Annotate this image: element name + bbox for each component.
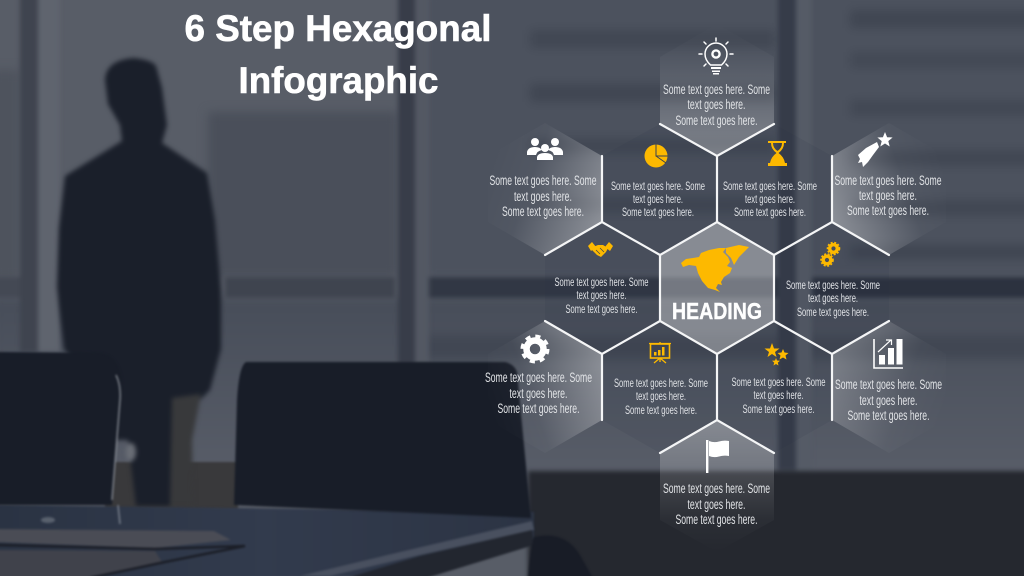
text block — [490, 173, 596, 219]
man silhouette — [57, 58, 221, 506]
panel: top hexagon — [663, 38, 770, 128]
text block: Some text goes here. Some — [490, 173, 596, 188]
text block: Some text goes here. Some — [663, 82, 770, 97]
panel: center heading hexagon — [672, 245, 762, 324]
center chair — [234, 362, 594, 576]
text block: text goes here. — [510, 386, 568, 401]
text block — [663, 481, 770, 527]
text block: text goes here. — [860, 393, 918, 408]
text block: Some text goes here. Some — [611, 179, 705, 193]
icon: hourglass — [768, 141, 787, 166]
text block: Some text goes here. Some — [485, 370, 592, 385]
heading text: HEADING — [672, 298, 762, 324]
panel: bottom hexagon — [663, 440, 770, 527]
hexagon white line grid — [545, 124, 889, 453]
text block: text goes here. — [576, 288, 626, 302]
text block: Some text goes here. Some — [835, 377, 942, 392]
table with notebook — [0, 505, 534, 576]
icon: growth bar chart — [874, 339, 903, 368]
panel: upper right hexagon — [834, 132, 942, 218]
panel: presentation hexagon — [614, 342, 708, 417]
text block: text goes here. — [754, 388, 804, 402]
text block: text goes here. — [808, 291, 858, 305]
panel: handshake hexagon — [554, 242, 649, 316]
text block: text goes here. — [745, 192, 795, 206]
panel: yellow gears hexagon — [786, 242, 880, 319]
text block: Some text goes here. — [622, 205, 694, 219]
icon: presentation board — [649, 342, 671, 363]
text block: Some text goes here. — [676, 113, 758, 128]
text block — [554, 275, 649, 316]
icon: pie chart — [644, 144, 668, 168]
text block — [835, 377, 942, 423]
text block: text goes here. — [514, 189, 572, 204]
text block — [732, 375, 826, 416]
panel: stars hexagon — [732, 343, 826, 416]
text block: Some text goes here. — [566, 302, 638, 316]
text block: Some text goes here. Some — [786, 278, 880, 292]
text block: Some text goes here. Some — [723, 179, 817, 193]
text block: Some text goes here. — [676, 512, 758, 527]
icon: north america map — [681, 245, 749, 292]
text block — [485, 370, 592, 416]
icon: people group — [527, 138, 563, 160]
text block: Some text goes here. Some — [732, 375, 826, 389]
text block: Some text goes here. — [742, 402, 814, 416]
text block — [723, 179, 817, 219]
text block — [611, 179, 705, 219]
text block: Some text goes here. Some — [554, 275, 649, 289]
icon: handshake — [588, 242, 613, 257]
panel: lower left hexagon — [485, 336, 592, 416]
text block: Some text goes here. Some — [614, 376, 708, 390]
text block: text goes here. — [688, 497, 746, 512]
text block: text goes here. — [859, 188, 917, 203]
text block: Some text goes here. — [625, 403, 697, 417]
title: Infographic — [238, 60, 438, 101]
text block: text goes here. — [688, 97, 746, 112]
icon: gears — [821, 242, 840, 266]
panel: upper left hexagon — [490, 138, 596, 219]
panel: hourglass hexagon — [723, 141, 817, 219]
title: 6 Step Hexagonal — [184, 8, 492, 49]
text block: Some text goes here. — [848, 408, 930, 423]
text block — [786, 278, 880, 319]
text block — [663, 82, 770, 128]
panel: lower right hexagon — [835, 339, 942, 423]
text block: Some text goes here. — [502, 204, 584, 219]
icon: three stars — [764, 343, 788, 366]
icon: light bulb with gear — [699, 38, 733, 74]
translucent hexagon fills — [488, 24, 946, 552]
left chair — [0, 352, 122, 505]
panel: pie chart hexagon — [611, 144, 705, 219]
text block: text goes here. — [636, 389, 686, 403]
text block: text goes here. — [633, 192, 683, 206]
title — [184, 8, 492, 101]
text block: Some text goes here. — [847, 203, 929, 218]
text block — [834, 173, 942, 218]
text block: Some text goes here. — [797, 305, 869, 319]
icon: flag — [706, 440, 729, 473]
icon: white gear — [522, 336, 548, 362]
text block: Some text goes here. — [498, 401, 580, 416]
text block: Some text goes here. Some — [663, 481, 770, 496]
text block: Some text goes here. Some — [834, 173, 942, 188]
text block: Some text goes here. — [734, 205, 806, 219]
text block — [614, 376, 708, 417]
icon: shooting star — [858, 132, 893, 167]
